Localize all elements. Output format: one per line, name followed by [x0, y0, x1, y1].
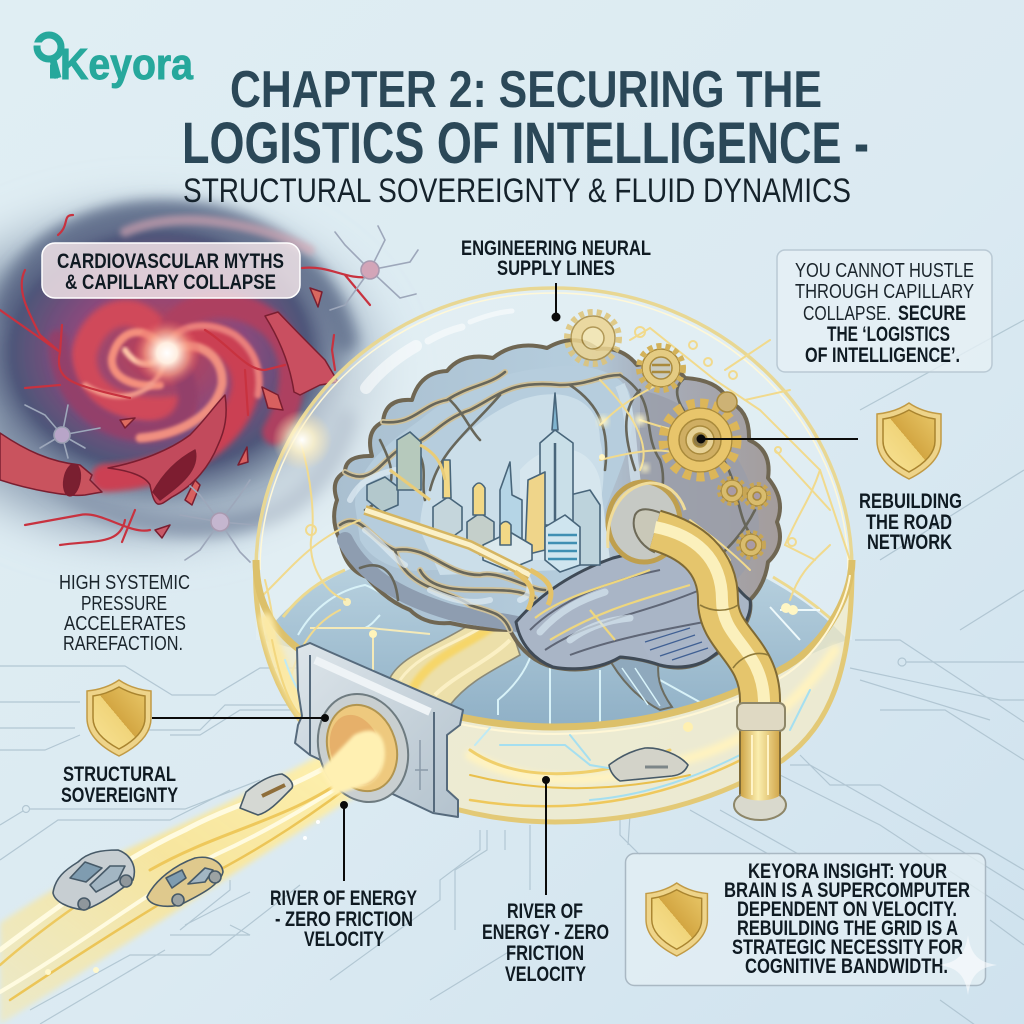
label: river of energy left: VELOCITY	[304, 928, 384, 951]
capillary branches	[0, 215, 370, 545]
shards	[262, 387, 283, 410]
insight text: KEYORA INSIGHT: YOUR	[748, 860, 947, 883]
text: high systemic pressure: RAREFACTION.	[63, 633, 183, 655]
callout: logistics of intelligence: THE ‘LOGISTICS	[827, 323, 950, 346]
panel: keyora insight	[626, 854, 986, 986]
label: river of energy center	[482, 900, 609, 986]
river strands	[0, 745, 380, 1000]
callout: cardiovascular myths: CARDIOVASCULAR MYTHS	[57, 250, 284, 273]
title	[182, 61, 869, 176]
icon: shield structural sovereignty	[87, 680, 151, 756]
vessel centre	[108, 395, 226, 504]
callout: logistics of intelligence: THROUGH CAPILLARY	[795, 281, 974, 303]
car two	[147, 857, 223, 906]
label: river of energy left: RIVER OF ENERGY	[270, 887, 417, 910]
logo	[32, 35, 193, 89]
dome containing the brain	[256, 288, 852, 727]
icon: shield road network	[877, 403, 941, 479]
big gear	[663, 403, 737, 477]
insight text	[724, 860, 970, 978]
neurons	[25, 226, 418, 562]
towers	[570, 490, 600, 565]
network glow points	[598, 415, 798, 615]
glass dome outline	[256, 288, 852, 570]
portal gate	[295, 643, 463, 817]
vessel left	[0, 433, 102, 495]
callout: cardiovascular myths	[42, 243, 300, 298]
vessel right	[265, 312, 338, 395]
brain stem	[607, 655, 672, 710]
title: CHAPTER 2: SECURING THE	[230, 61, 822, 119]
text: high systemic pressure	[59, 572, 190, 655]
gold topped blocks	[433, 497, 462, 540]
text: high systemic pressure: ACCELERATES	[64, 613, 186, 635]
torn vessels	[0, 288, 338, 538]
callout: logistics of intelligence	[777, 250, 992, 372]
back rim	[283, 570, 830, 618]
brain folds	[340, 372, 755, 630]
portal opening	[304, 682, 422, 814]
transparent ring with energy flow	[256, 560, 852, 822]
glow burst on dome edge	[272, 410, 332, 470]
connector lines	[152, 283, 858, 895]
label: rebuilding the road network	[859, 490, 962, 554]
pipe collar on brain	[634, 509, 668, 552]
brain silhouette	[334, 340, 780, 669]
top gear	[567, 312, 619, 364]
circuit board traces	[0, 320, 1024, 1024]
outer grey swirl bands	[5, 213, 345, 526]
label: engineering neural supply lines: SUPPLY LINES	[497, 257, 615, 280]
glass dome fill	[256, 288, 852, 640]
brass pipe	[608, 482, 786, 820]
text: high systemic pressure: PRESSURE	[81, 593, 167, 615]
pipe flange on brain	[608, 482, 680, 562]
upper gear	[639, 346, 683, 390]
label: engineering neural supply lines: ENGINEERING NEURAL	[461, 237, 651, 260]
flowing energy	[266, 620, 835, 806]
lower lobe blue shading	[350, 470, 529, 602]
icon: sparkle	[939, 935, 997, 995]
label: river of energy center: VELOCITY	[505, 963, 586, 986]
callout: logistics of intelligence: OF INTELLIGENCE’.	[805, 344, 960, 367]
vortex of capillary collapse	[0, 185, 418, 565]
subtitle: STRUCTURAL SOVEREIGNTY & FLUID DYNAMICS	[183, 172, 851, 210]
callout: logistics of intelligence: YOU CANNOT HUSTLE	[795, 260, 974, 282]
label: rebuilding the road network: NETWORK	[867, 531, 952, 554]
label: structural sovereignty: STRUCTURAL	[63, 763, 176, 786]
insight text: DEPENDENT ON VELOCITY.	[737, 898, 957, 921]
label: engineering neural supply lines	[461, 237, 651, 280]
dome highlights	[366, 311, 512, 388]
gears	[567, 312, 769, 558]
brain	[334, 340, 780, 710]
gold road	[365, 510, 530, 575]
pipe base	[734, 790, 786, 820]
label: river of energy center: FRICTION	[506, 942, 584, 965]
floor	[262, 545, 848, 727]
car one	[53, 850, 134, 910]
river of energy	[0, 728, 388, 1024]
label: river of energy left	[270, 887, 417, 951]
brain light lobes	[355, 366, 633, 571]
text: high systemic pressure: HIGH SYSTEMIC	[59, 572, 190, 594]
icon: shield insight	[646, 883, 707, 956]
label: structural sovereignty: SOVEREIGNTY	[61, 784, 178, 807]
floor circuit lines	[298, 585, 820, 725]
spiral arms	[58, 220, 310, 478]
insight text: STRATEGIC NECESSITY FOR	[732, 936, 963, 959]
callout: logistics of intelligence: COLLAPSE.	[803, 303, 891, 325]
car three	[240, 774, 293, 815]
label: rebuilding the road network: REBUILDING	[859, 490, 962, 513]
label: rebuilding the road network: THE ROAD	[866, 511, 952, 534]
lower brain lobe	[516, 548, 750, 669]
label: river of energy left: - ZERO FRICTION	[275, 908, 413, 931]
miniature city inside brain	[365, 393, 600, 610]
label: structural sovereignty	[61, 763, 178, 807]
gold flow from brain to the portal	[388, 615, 520, 705]
small gears	[717, 392, 769, 558]
label: river of energy center: RIVER OF	[507, 900, 583, 923]
callout: logistics of intelligence: SECURE	[898, 302, 966, 325]
cars	[53, 748, 688, 910]
label: river of energy center: ENERGY - ZERO	[482, 921, 609, 944]
logo: Keyora	[60, 40, 193, 89]
pipe collar	[737, 703, 785, 731]
cerebellum fan	[640, 625, 715, 663]
key icon	[32, 35, 61, 78]
insight text: COGNITIVE BANDWIDTH.	[745, 955, 948, 978]
lower left shaded folds	[345, 540, 520, 625]
insight text: REBUILDING THE GRID IS A	[737, 917, 958, 940]
callout: cardiovascular myths: & CAPILLARY COLLAPSE	[65, 271, 276, 294]
tan fold backing	[340, 372, 620, 630]
car four	[609, 748, 688, 781]
golden neural network	[258, 327, 850, 680]
